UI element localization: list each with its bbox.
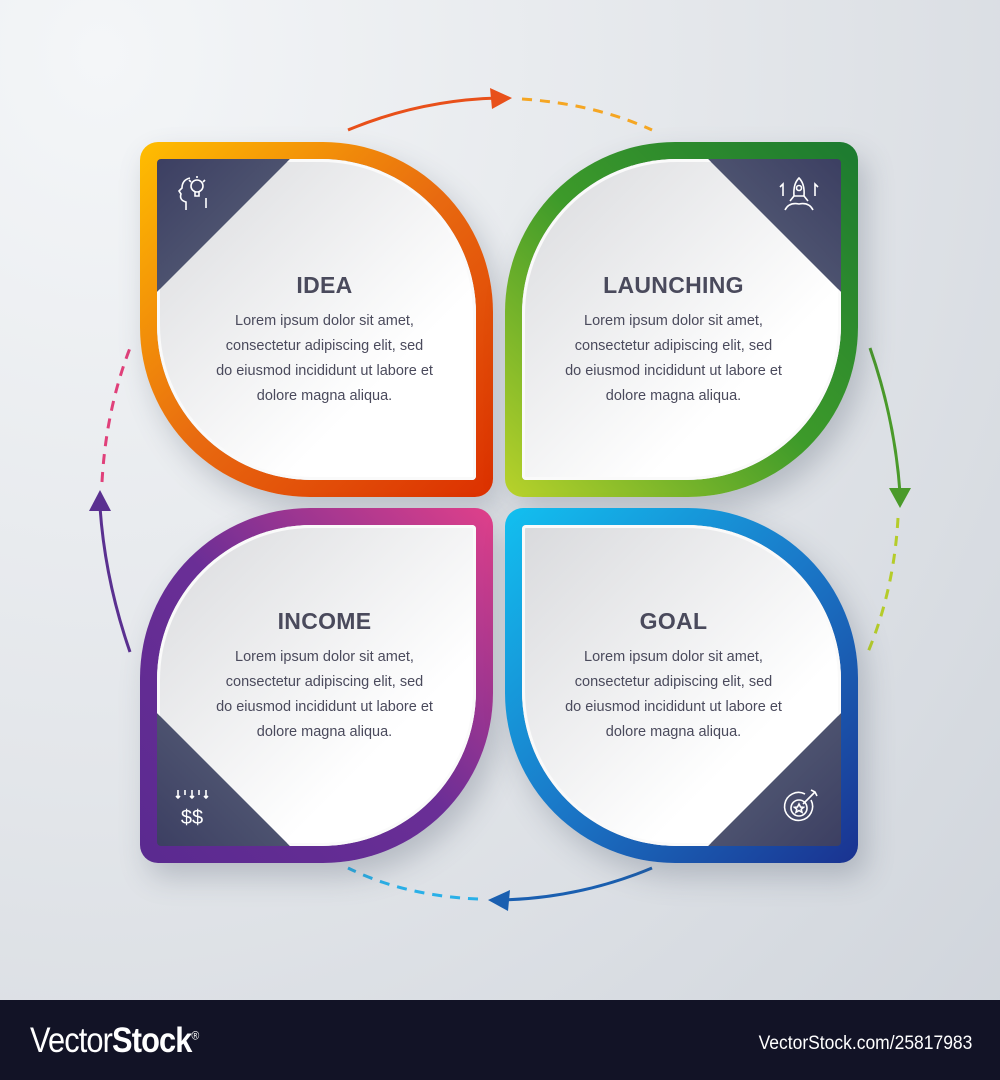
- panel: idea: [140, 142, 493, 497]
- text: idea: [216, 272, 433, 404]
- footer logo: VectorStock®: [30, 1021, 198, 1060]
- icon: rocket: [780, 177, 818, 210]
- text: goal: dolore magna aliqua.: [606, 724, 741, 740]
- text: goal: consectetur adipiscing elit, sed: [575, 674, 772, 690]
- panel: goal: [505, 508, 858, 863]
- text: idea: dolore magna aliqua.: [257, 388, 392, 404]
- panel: income: [140, 508, 493, 863]
- text: goal: Lorem ipsum dolor sit amet,: [584, 649, 763, 665]
- icon: idea head: [178, 176, 207, 210]
- text: launching: do eiusmod incididunt ut labore et: [565, 363, 782, 379]
- text: idea: Lorem ipsum dolor sit amet,: [235, 313, 414, 329]
- icon: target: [784, 789, 818, 822]
- text: income: [216, 608, 433, 740]
- icon: money: [176, 790, 208, 828]
- text: goal: GOAL: [640, 608, 707, 634]
- footer url: VectorStock.com/25817983: [758, 1033, 972, 1054]
- text: launching: LAUNCHING: [603, 272, 744, 298]
- text: goal: [565, 608, 782, 740]
- text: idea: consectetur adipiscing elit, sed: [226, 338, 423, 354]
- text: launching: dolore magna aliqua.: [606, 388, 741, 404]
- text: income: consectetur adipiscing elit, sed: [226, 674, 423, 690]
- text: income: do eiusmod incididunt ut labore et: [216, 699, 433, 715]
- text: income: INCOME: [278, 608, 371, 634]
- panel: launching: [505, 142, 858, 497]
- text: income: dolore magna aliqua.: [257, 724, 392, 740]
- text: launching: consectetur adipiscing elit, sed: [575, 338, 772, 354]
- text: idea: IDEA: [296, 272, 353, 298]
- text: idea: do eiusmod incididunt ut labore et: [216, 363, 433, 379]
- text: income: Lorem ipsum dolor sit amet,: [235, 649, 414, 665]
- text: launching: [565, 272, 782, 404]
- footer bar: [0, 1000, 1000, 1080]
- text: goal: do eiusmod incididunt ut labore et: [565, 699, 782, 715]
- text: launching: Lorem ipsum dolor sit amet,: [584, 313, 763, 329]
